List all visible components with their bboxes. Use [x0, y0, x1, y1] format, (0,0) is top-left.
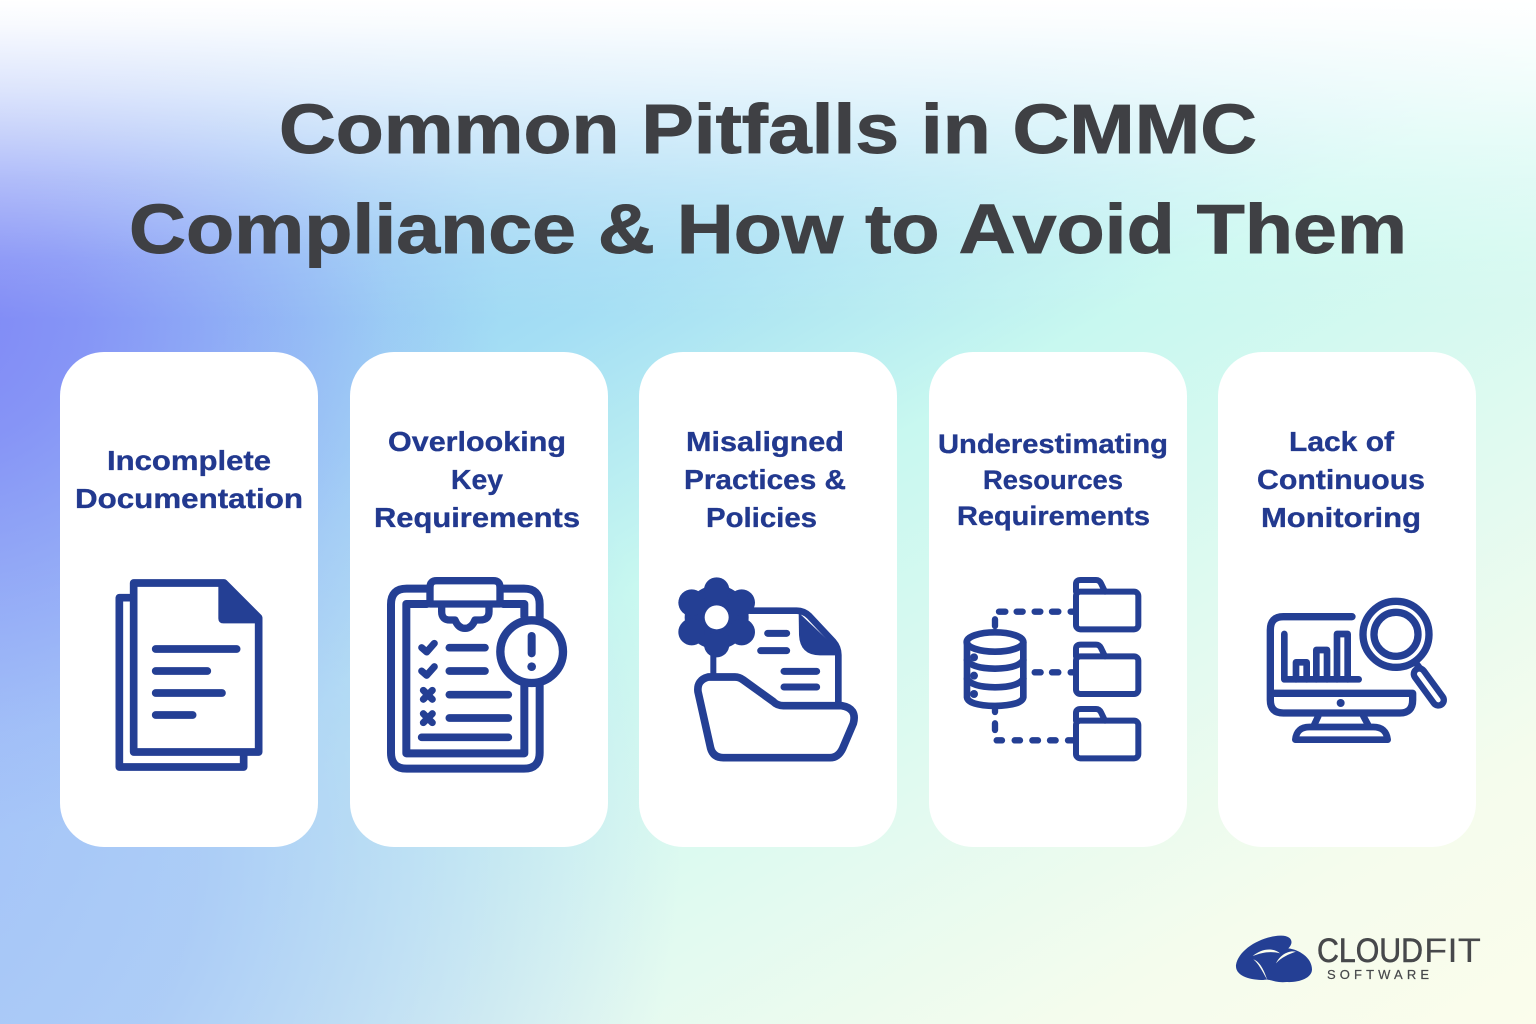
icon part: gear [678, 577, 755, 657]
heading: lack of continuous monitoring: Monitoring [1261, 502, 1421, 533]
heading: misaligned practices and policies: Misaligned [686, 426, 844, 457]
heading: underestimating resources requirements: Underestimating [938, 429, 1168, 459]
icon: monitor and magnifier [1270, 601, 1438, 740]
logo wordmark: FIT [1424, 932, 1481, 970]
logo wordmark: SOFTWARE [1327, 967, 1429, 982]
icon: database linked to folders [967, 580, 1138, 758]
heading: incomplete documentation [75, 445, 303, 514]
panel: overlooking key requirements [350, 352, 608, 847]
panel: misaligned practices and policies [639, 352, 897, 847]
title [129, 90, 1407, 268]
icon: gear, document and folder [678, 577, 854, 758]
heading: lack of continuous monitoring: Lack of [1289, 426, 1395, 457]
heading: underestimating resources requirements: Resources [983, 465, 1123, 495]
title: Common Pitfalls in CMMC [279, 90, 1257, 168]
panel: underestimating resources requirements [929, 352, 1187, 847]
icon part: folders [1076, 580, 1138, 758]
heading: misaligned practices and policies: Policies [706, 502, 817, 533]
logo: CloudFit Software [1236, 932, 1481, 982]
heading: overlooking key requirements: Overlooking [388, 426, 566, 457]
heading: underestimating resources requirements: Requirements [957, 501, 1150, 531]
heading: underestimating resources requirements [938, 429, 1168, 531]
heading: misaligned practices and policies [684, 426, 846, 533]
heading: overlooking key requirements: Requirements [374, 502, 580, 533]
logo mark: cloud [1236, 936, 1312, 982]
heading: misaligned practices and policies: Practices & [684, 464, 846, 495]
heading: overlooking key requirements: Key [451, 464, 503, 495]
logo wordmark [1317, 932, 1481, 982]
heading: lack of continuous monitoring [1257, 426, 1425, 533]
title: Compliance & How to Avoid Them [129, 190, 1407, 268]
heading: incomplete documentation: Documentation [75, 483, 303, 514]
panel: incomplete documentation [60, 352, 318, 847]
logo wordmark: CLOUD [1317, 932, 1423, 970]
icon: stacked documents [119, 583, 262, 767]
icon: clipboard with alert [391, 581, 563, 769]
heading: incomplete documentation: Incomplete [107, 445, 271, 476]
heading: overlooking key requirements [374, 426, 580, 533]
heading: lack of continuous monitoring: Continuous [1257, 464, 1425, 495]
panel: lack of continuous monitoring [1218, 352, 1476, 847]
